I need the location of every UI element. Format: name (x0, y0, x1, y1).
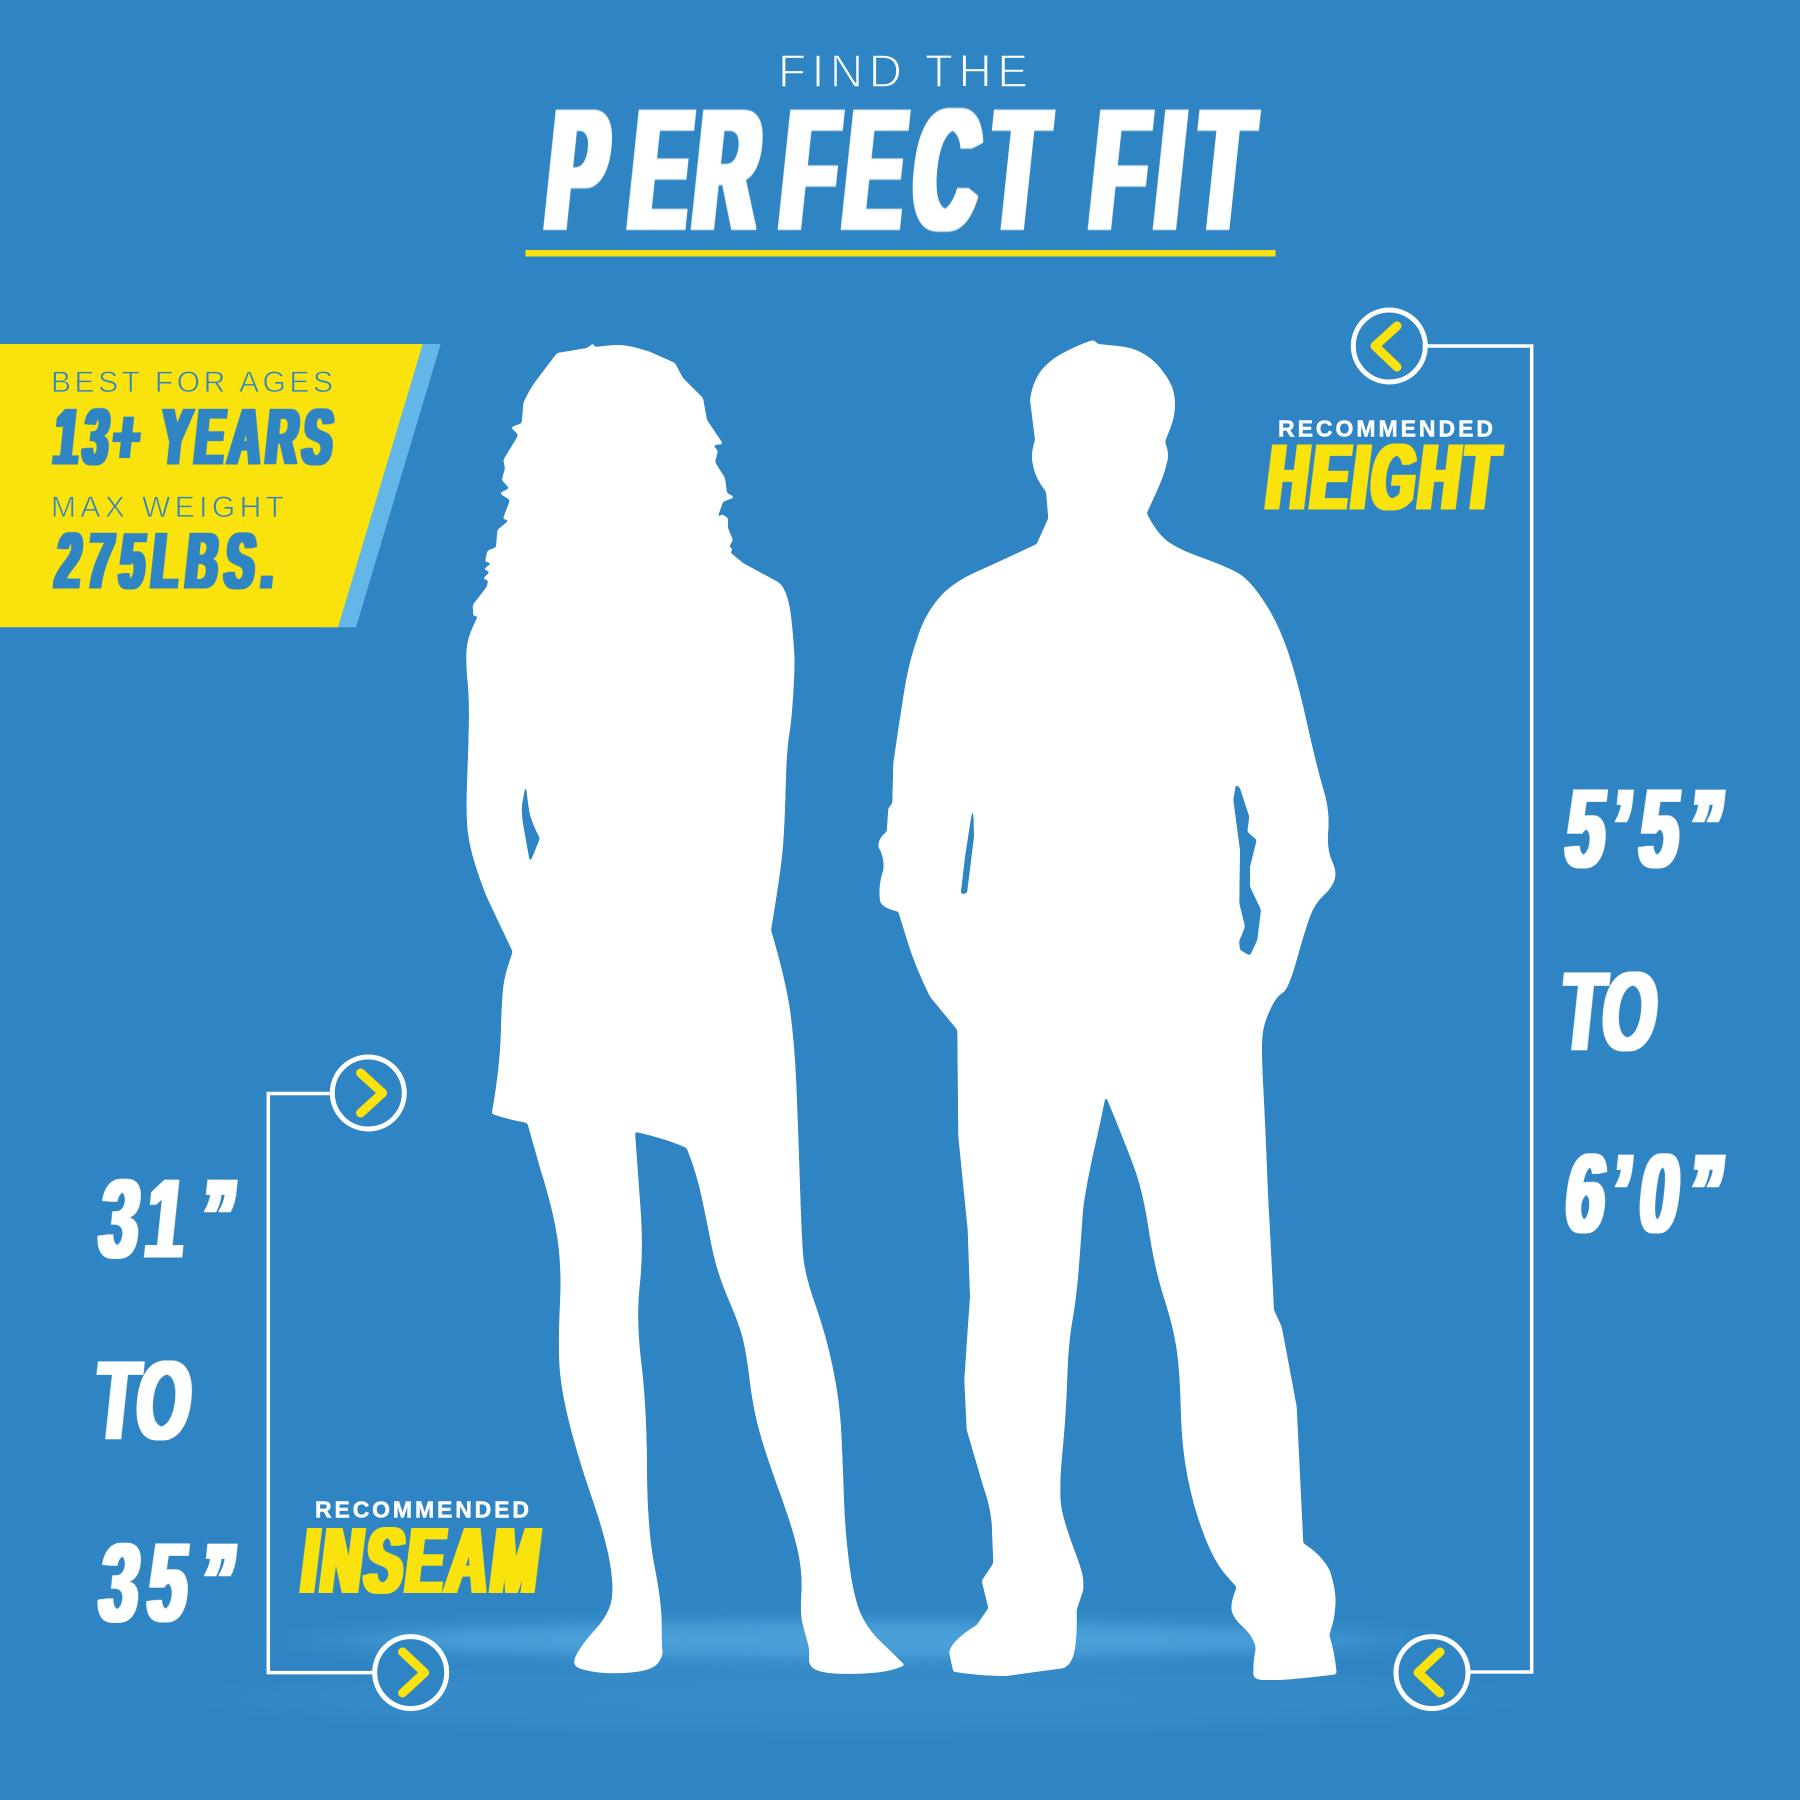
value 31": 31” (94, 1155, 243, 1281)
value 6'0": 6’0” (1560, 1130, 1731, 1256)
title: find the: FIND THE (778, 45, 1028, 97)
13+ years value: 13+ YEARS (50, 392, 337, 481)
silhouette: woman (466, 343, 905, 1674)
height bracket (1427, 346, 1532, 1672)
recommended label: RECOMMENDED (1278, 416, 1493, 442)
silhouette: man (878, 340, 1337, 1680)
275lbs value: 275LBS. (52, 516, 279, 605)
inseam values (89, 1155, 243, 1645)
value 35": 35” (94, 1519, 243, 1645)
value to: TO (89, 1337, 198, 1463)
title: perfect fit: PERFECT FIT (539, 73, 1260, 266)
panel: ages and weight (0, 344, 441, 627)
icon: height bottom marker (1396, 1637, 1468, 1709)
inseam heading: INSEAM (296, 1509, 545, 1613)
icon: inseam top marker (332, 1057, 404, 1129)
recommended label: RECOMMENDED (315, 1496, 529, 1522)
inseam callout (89, 1057, 545, 1709)
title (526, 45, 1276, 266)
floor glow (180, 1618, 1540, 1740)
inseam bracket (268, 1094, 375, 1673)
height heading: HEIGHT (1261, 426, 1504, 530)
panel yellow body (0, 344, 423, 627)
height values (1555, 765, 1731, 1256)
value to: TO (1555, 948, 1664, 1074)
max weight label: MAX WEIGHT (51, 491, 284, 524)
value 5'5": 5’5” (1560, 765, 1731, 891)
icon: inseam bottom marker (375, 1637, 447, 1709)
icon: height top marker (1353, 310, 1425, 382)
best for ages label: BEST FOR AGES (51, 366, 333, 399)
title underline (526, 250, 1276, 256)
height callout (1261, 310, 1731, 1709)
panel light blue edge (320, 344, 441, 627)
